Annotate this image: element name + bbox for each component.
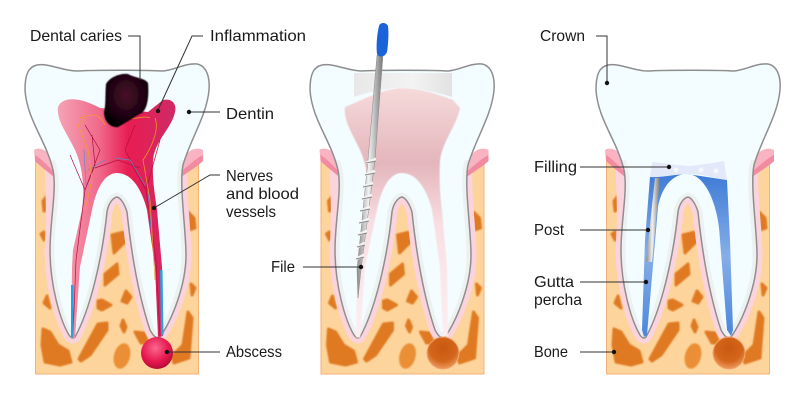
tooth body	[310, 64, 494, 338]
inflamed bone area	[713, 337, 745, 369]
label: Inflammation	[156, 28, 306, 113]
label: Post: Post	[534, 222, 565, 239]
temporary filling block	[354, 73, 452, 97]
bone tissue	[36, 162, 198, 374]
label: Dentin: Dentin	[226, 106, 274, 123]
label: Gutta percha	[534, 274, 648, 309]
endodontic file	[356, 23, 388, 298]
gutta percha in canals	[642, 174, 733, 337]
label: Dentin	[187, 106, 274, 123]
tooth body	[25, 64, 209, 338]
pulp chamber	[58, 99, 175, 338]
tooth body	[596, 64, 780, 338]
gums	[320, 149, 488, 177]
label: Nerves and blood vessels: Nerves	[226, 168, 273, 185]
label: Nerves and blood vessels	[152, 168, 299, 221]
nerves and blood vessels	[70, 115, 160, 336]
label: Abscess: Abscess	[226, 344, 282, 361]
label: Crown	[540, 28, 609, 85]
label: File: File	[271, 259, 295, 276]
abscess	[141, 337, 173, 369]
label: File	[271, 259, 363, 276]
label: Abscess	[165, 344, 282, 361]
inflamed bone area	[427, 337, 459, 369]
panel: restored tooth	[596, 64, 780, 374]
label: Bone: Bone	[534, 344, 568, 361]
filling	[650, 161, 727, 180]
label: Dental caries: Dental caries	[30, 28, 122, 45]
label: Filling	[534, 159, 671, 176]
label: Inflammation: Inflammation	[210, 28, 306, 45]
cleaned pulp chamber	[345, 88, 460, 338]
label: Gutta percha: percha	[534, 292, 582, 309]
label: Bone	[534, 344, 616, 361]
pink tissue around root	[621, 160, 757, 338]
pink tissue around root	[50, 160, 186, 338]
panel: root canal cleaning tooth	[310, 23, 494, 374]
label: Gutta percha: Gutta	[534, 274, 574, 291]
label: Crown: Crown	[540, 28, 585, 45]
label: Post	[534, 222, 650, 239]
post	[646, 178, 660, 262]
gums	[605, 149, 774, 177]
label: Filling: Filling	[534, 159, 577, 176]
bone tissue	[321, 162, 484, 374]
dental caries cavity	[104, 74, 148, 127]
right root canal blue tip	[160, 270, 164, 336]
left root canal blue tip	[71, 285, 74, 337]
pink tissue around root	[335, 160, 471, 338]
label: Nerves and blood vessels: and blood	[226, 186, 299, 203]
label: Dental caries	[30, 28, 140, 80]
panel: infected tooth	[25, 64, 209, 374]
gums	[34, 149, 203, 177]
bone tissue	[606, 162, 770, 374]
label: Nerves and blood vessels: vessels	[226, 204, 276, 221]
